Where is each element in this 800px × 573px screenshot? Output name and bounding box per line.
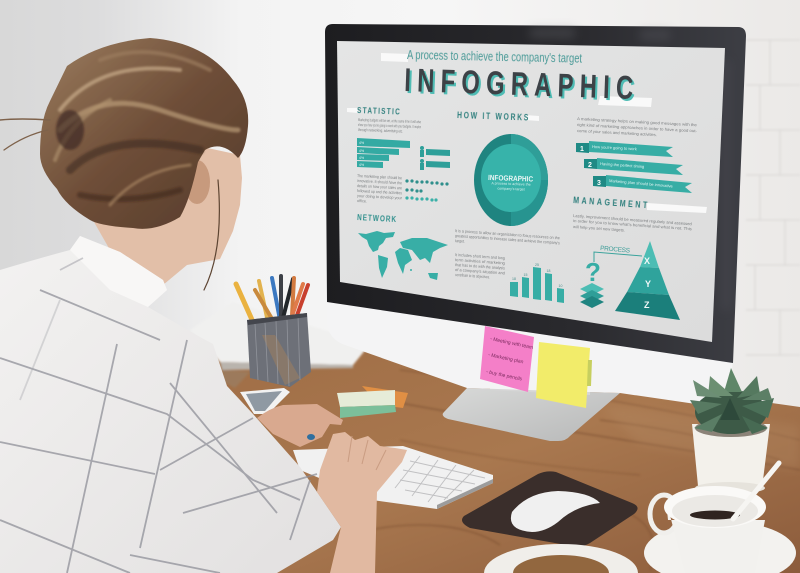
pyramid diagram <box>615 241 680 320</box>
succulent leaves <box>690 368 774 434</box>
coffee cup with spoon <box>650 463 779 573</box>
text: process paragraph: It is a process to allow an organization to focus resources on the <box>455 228 561 240</box>
subtitle: A process to achieve the company's target <box>407 47 582 66</box>
ribbon 1 <box>576 141 673 157</box>
bezel reflections <box>530 28 730 310</box>
heading: statistic: STATISTIC <box>357 105 400 117</box>
plaid pattern <box>0 258 317 573</box>
dot chart <box>405 179 449 202</box>
ribbon 3: Marketing plan should be innovative <box>609 178 674 189</box>
sticky note: pink: - Marketing plan <box>488 352 524 365</box>
text: strategy paragraph: come of your sales and marketing activities. <box>577 128 657 137</box>
text: strategy paragraph <box>577 116 698 137</box>
person seen from behind <box>0 38 407 573</box>
plate with cookie <box>484 544 638 573</box>
notebook and papers behind the pencil cup <box>190 302 370 388</box>
ribbon 3: 3 <box>597 180 601 187</box>
text: strategy paragraph: A marketing strategy helps on making good messages with the <box>577 116 698 127</box>
ribbon 1: How you're going to work <box>592 144 637 151</box>
spoon <box>733 463 779 519</box>
text: statistic intro <box>358 117 422 134</box>
bar chart: column values: 18 <box>547 269 550 273</box>
sticky note: pink <box>480 326 534 392</box>
bar chart: column values: 18 <box>512 277 516 281</box>
shirt <box>0 236 341 573</box>
ribbon 3 <box>593 175 692 193</box>
panel: network <box>357 212 448 280</box>
text: marketing plan note: The marketing plan should be <box>357 173 403 180</box>
text: statistic intro: through networking, advertising etc. <box>358 127 403 134</box>
donut diagram <box>474 134 548 226</box>
text: management paragraph: will help you set new targets. <box>573 224 625 233</box>
pencil cup with pens <box>236 276 311 387</box>
text: donut caption: company's target <box>497 187 525 191</box>
sticky note pads <box>337 386 408 418</box>
text: process paragraph: target. <box>455 238 465 244</box>
text: marketing plan note <box>357 173 403 204</box>
sticky note: yellow <box>536 342 592 408</box>
bar chart: percentages: 4% <box>359 149 364 153</box>
panel: marketing strategy ribbons <box>576 116 698 193</box>
heading: management: MANAGEMENT <box>573 194 648 210</box>
text: donut caption <box>491 181 531 191</box>
title: INFOGRAPHIC with teal shadow: INFOGRAPHIC <box>406 64 636 109</box>
ribbon 2: 2 <box>588 162 592 169</box>
potted succulent plant <box>690 368 774 494</box>
wooden desk <box>160 351 800 573</box>
bar chart: percentages: 4% <box>359 156 364 160</box>
world map <box>358 231 448 280</box>
panel: how it works <box>455 110 564 303</box>
pyramid diagram: X <box>644 256 650 266</box>
bar chart: column values: 15 <box>524 273 527 277</box>
cup handle <box>650 495 678 533</box>
ear <box>184 160 210 204</box>
ribbon 2 <box>584 158 683 175</box>
hair <box>0 38 248 290</box>
text: marketing plan note: office. <box>357 198 367 204</box>
donut label: INFOGRAPHIC <box>488 173 534 184</box>
text: marketing plan note: innovative. It should have the <box>357 178 403 185</box>
text: marketing plan note: details on how your sales are <box>357 183 403 190</box>
text: management paragraph: in order for you to know what's beneficial and what is not. This <box>573 218 692 231</box>
bar chart: column values: 10 <box>559 284 562 288</box>
panel: statistic <box>347 105 450 204</box>
wireless keyboard <box>293 446 493 509</box>
subtitle highlight bar <box>381 53 408 62</box>
face and neck <box>90 140 242 285</box>
ribbon 2: Having the perfect timing <box>600 161 644 169</box>
text: statistic intro: Marketing budgets will be set, at the same time it will also <box>358 117 422 124</box>
icon: stacked layers <box>580 283 604 308</box>
bar chart: percentages: 4% <box>359 163 364 167</box>
title highlight bar <box>598 96 652 107</box>
near hand and forearm on keyboard <box>317 432 407 573</box>
text: process paragraph: greatest opportunities to increase sales and achieve the company's <box>455 233 560 245</box>
pyramid diagram: Y <box>645 279 651 289</box>
process label and connector: PROCESS <box>600 245 631 255</box>
text: donut caption: A process to achieve the <box>491 181 531 187</box>
bar chart: column values <box>510 263 564 303</box>
wireless mouse <box>511 491 600 532</box>
bar chart: percentages <box>357 138 410 168</box>
icon: question mark: ? <box>585 257 601 287</box>
pyramid diagram: Z <box>644 300 650 310</box>
sticky note: pink: - buy the pencils <box>486 369 523 383</box>
heading: network: NETWORK <box>357 212 397 224</box>
monitor stand base <box>443 340 620 441</box>
coffee saucer <box>644 521 796 573</box>
title: INFOGRAPHIC with teal shadow: INFOGRAPHIC <box>404 62 634 107</box>
text: marketing plan note: your doing to develop your <box>357 193 403 200</box>
text: shortcuts paragraph: that has to do with the analysis <box>455 262 505 270</box>
ribbon 1: 1 <box>580 146 584 153</box>
phone on desk <box>240 388 290 414</box>
text: management paragraph: Lastly, improvement should be measured regularly and assessed <box>573 213 692 226</box>
far hand on desk <box>257 404 343 447</box>
text: shortcuts paragraph <box>455 252 505 279</box>
mouse pad <box>462 471 638 547</box>
bar chart: percentages: 4% <box>359 141 364 145</box>
text: shortcuts paragraph: It includes short term and long <box>455 252 505 260</box>
panel: management <box>573 194 707 320</box>
text: shortcuts paragraph: contribute to its objectives. <box>455 272 490 279</box>
text: shortcuts paragraph: term activities of marketing <box>455 257 505 265</box>
monitor bezel <box>325 24 746 363</box>
text: management paragraph <box>573 213 692 233</box>
heading: how it works: HOW IT WORKS <box>457 110 528 123</box>
text: statistic intro: show you how you're going to work with your budgets. It maybe <box>358 122 422 129</box>
text: shortcuts paragraph: of a company's situation and <box>455 267 505 275</box>
icon: people with value pills <box>420 146 450 170</box>
monitor chin <box>327 295 733 409</box>
text: marketing plan note: followed up and the activities <box>357 188 402 195</box>
sticky note: pink: - Meeting with team <box>490 336 534 351</box>
text: strategy paragraph: right kind of marketing approaches in order to have a good out- <box>577 122 698 133</box>
shirt collar <box>70 236 167 307</box>
bar chart: column values: 25 <box>535 263 539 267</box>
monitor screen displaying the infographic <box>337 41 725 342</box>
